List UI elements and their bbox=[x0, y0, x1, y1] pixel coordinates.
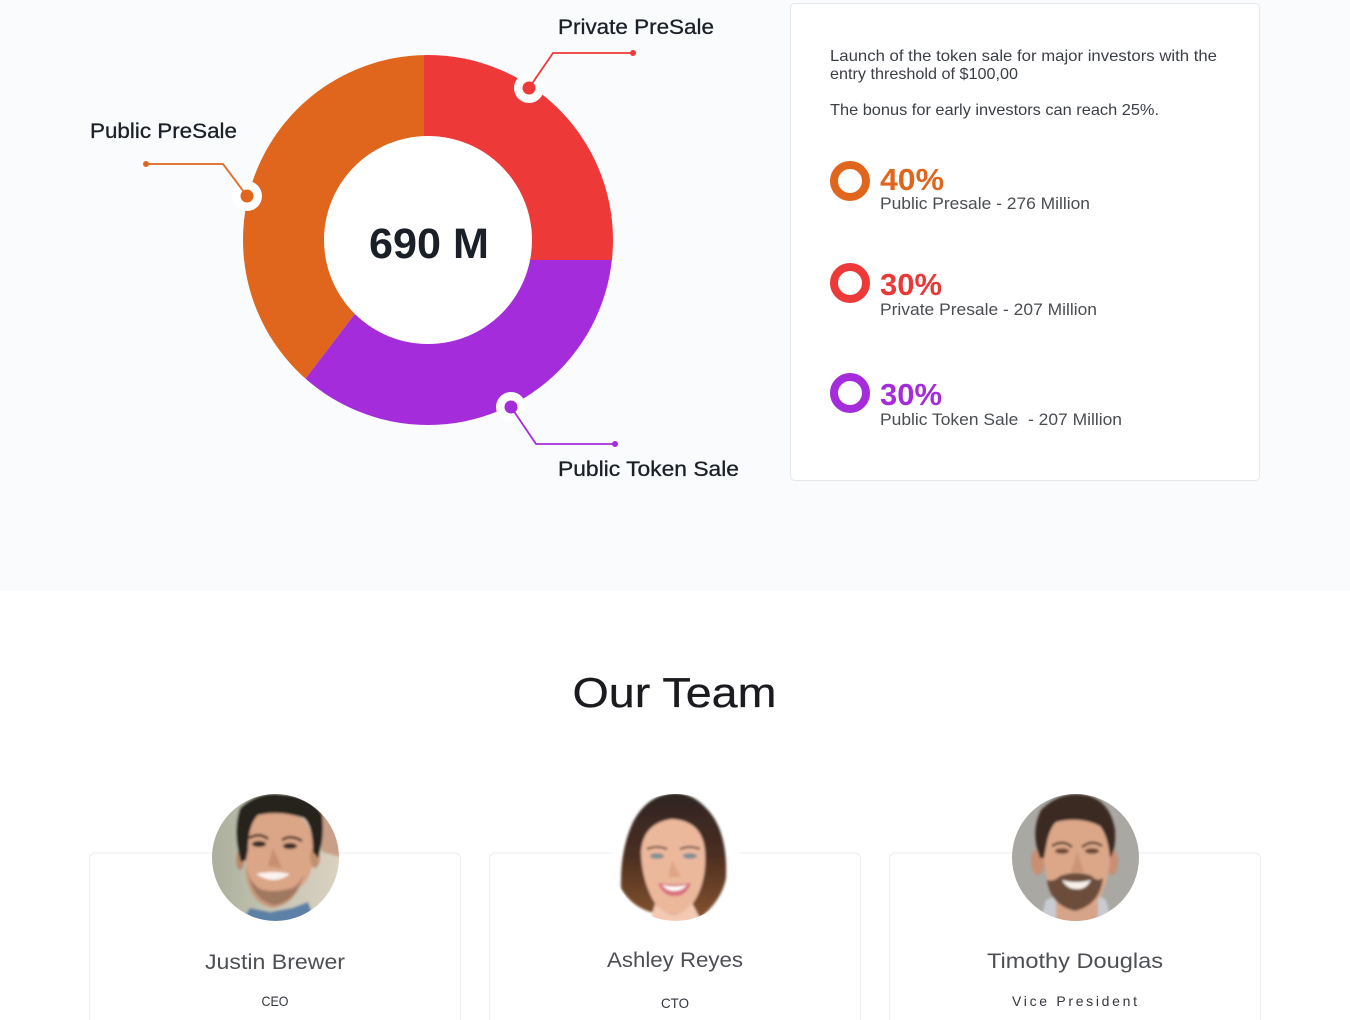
name: Ashley Reyes bbox=[607, 949, 743, 972]
role: CTO bbox=[661, 995, 689, 1011]
portrait: Timothy Douglas bbox=[1012, 794, 1140, 923]
stat: private presale 30%: Private Presale - 207 Million bbox=[880, 301, 1097, 319]
callout: public presale bbox=[90, 120, 262, 211]
donut chart bbox=[243, 55, 613, 425]
stat: public presale 40%: Public Presale - 276 Million bbox=[880, 195, 1090, 213]
stat: public presale 40%: 40% bbox=[880, 162, 944, 197]
donut total: 690 M bbox=[369, 220, 489, 268]
stat: public presale 40% bbox=[834, 162, 1090, 213]
callout: public presale: Public PreSale bbox=[90, 120, 237, 143]
description: The bonus for early investors can reach 25%. bbox=[830, 102, 1159, 119]
team card: Justin Brewer bbox=[90, 790, 460, 1020]
team card: Timothy Douglas bbox=[890, 794, 1260, 1020]
role: CEO bbox=[262, 993, 289, 1009]
section background bbox=[0, 0, 1350, 591]
description: entry threshold of $100,00 bbox=[830, 66, 1018, 83]
heading: our team: Our Team bbox=[572, 669, 776, 716]
description: Launch of the token sale for major investors with the bbox=[830, 48, 1217, 65]
callout: private presale bbox=[514, 16, 714, 103]
callout: public token sale bbox=[496, 392, 739, 481]
stat: public token sale 30% bbox=[834, 377, 1122, 429]
panel: token sale details bbox=[790, 4, 1260, 480]
description bbox=[830, 48, 1217, 119]
portrait: Ashley Reyes bbox=[612, 793, 740, 922]
stat: private presale 30%: 30% bbox=[880, 267, 942, 302]
name: Timothy Douglas bbox=[987, 950, 1163, 973]
callout: public token sale: Public Token Sale bbox=[558, 458, 739, 481]
name: Justin Brewer bbox=[205, 951, 345, 974]
callout: private presale: Private PreSale bbox=[558, 16, 714, 39]
stat: public token sale 30%: 30% bbox=[880, 377, 942, 412]
portrait: Justin Brewer bbox=[212, 794, 339, 921]
stat: private presale 30% bbox=[834, 267, 1097, 319]
role: Vice President bbox=[1012, 993, 1137, 1009]
team card: Ashley Reyes bbox=[490, 793, 860, 1020]
stat: public token sale 30%: Public Token Sale - 207 Million bbox=[880, 411, 1122, 429]
